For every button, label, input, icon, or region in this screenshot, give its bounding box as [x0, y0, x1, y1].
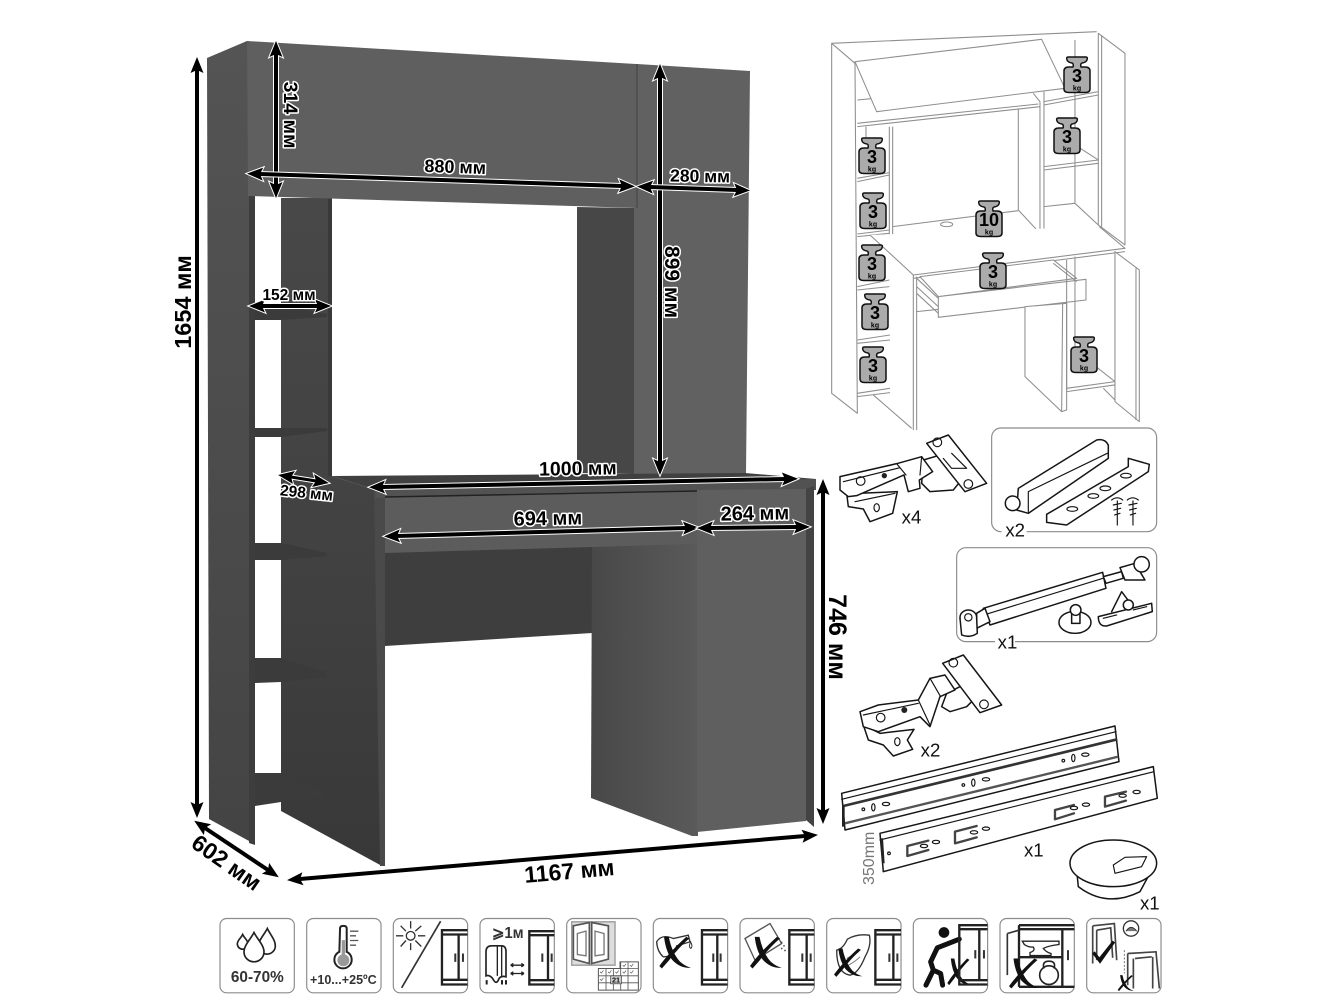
- hardware upper group: [840, 428, 1157, 652]
- right upper door: [1098, 33, 1125, 245]
- weight: 3 kg drawer: [980, 253, 1006, 288]
- runner length label: 350mm: [861, 832, 878, 885]
- weight: 10 kg desktop: kg: [985, 230, 993, 236]
- pedestal door: [697, 489, 806, 832]
- weight: 3 kg left shelf 4: [862, 294, 888, 330]
- dimension: 880 mm: 880 мм: [424, 156, 486, 178]
- pedestal inner side: [591, 535, 698, 836]
- weight: 3 kg right shelf: kg: [1063, 146, 1071, 154]
- icon: do not overload shelves: [1000, 918, 1074, 993]
- weight: 3 kg right shelf: 3: [1062, 127, 1072, 147]
- weight: 3 kg top right: kg: [1073, 86, 1081, 92]
- weight: 3 kg left shelf 3: [859, 245, 885, 280]
- weight: 3 kg left shelf 5: 3: [868, 356, 878, 376]
- weight: 3 kg drawer: kg: [989, 282, 997, 288]
- weight: 3 kg left shelf 3: kg: [868, 274, 876, 280]
- cable grommet x1: x1: [1140, 892, 1160, 913]
- desk back panel: [385, 540, 592, 646]
- pedestal and lower door: [1025, 252, 1139, 422]
- hardware lower group: [842, 655, 1160, 913]
- icon: do not move by pushing: [913, 918, 988, 993]
- drawer runner 1: [842, 726, 1119, 830]
- hinge x2: x2: [921, 740, 940, 761]
- icon: 1 m distance from heaters: ⩾1м: [492, 925, 524, 942]
- furniture: dark grey desk with hutch: [207, 41, 816, 866]
- hinge x4: x4: [902, 506, 921, 527]
- dimension: desk height 746 mm: 746 мм: [823, 594, 851, 680]
- icon: no sharp or hot objects: [653, 918, 728, 993]
- weight: 3 kg left shelf 5: kg: [869, 376, 877, 382]
- icon: temperature +10...+25°C: +10...+25ºC: [310, 972, 377, 987]
- cable grommet x1: [1070, 840, 1160, 913]
- icon: window ventilation and calendar: 21: [612, 975, 620, 984]
- dimension: 880 mm: [260, 156, 622, 186]
- weight: 3 kg left shelf 1: 3: [867, 147, 877, 167]
- right tower interior panel: [577, 207, 634, 474]
- weight: 3 kg left shelf 1: [859, 138, 885, 174]
- dimension: 694 mm: 694 мм: [513, 507, 582, 531]
- dimension: 1000 mm: 1000 мм: [539, 457, 617, 481]
- weight: 3 kg left shelf 5: [860, 347, 886, 382]
- dimension: width 1167 mm: [300, 836, 805, 888]
- open drawer: [917, 260, 1086, 317]
- weight: 3 kg pedestal: [1071, 337, 1097, 372]
- weight: 3 kg right shelf: [1054, 118, 1080, 154]
- dimension: 314 mm: 314 мм: [279, 82, 301, 148]
- box: door damper x2: [992, 428, 1157, 541]
- hinge x4: [840, 435, 987, 527]
- weight: 3 kg left shelf 4: kg: [871, 322, 879, 330]
- care and usage icon row: [220, 918, 1161, 993]
- dimension: width 1167 mm: 1167 мм: [523, 854, 615, 888]
- weight: 3 kg pedestal: kg: [1080, 366, 1088, 372]
- upper cabinet flap door: [247, 41, 637, 208]
- weight: 3 kg pedestal: 3: [1079, 346, 1089, 366]
- weight: 3 kg left shelf 2: kg: [869, 222, 877, 228]
- dimension: 314 mm: [276, 54, 301, 185]
- box: door damper x2: x2: [1005, 520, 1025, 541]
- weight: 3 kg left shelf 1: kg: [868, 166, 876, 174]
- right tower door: [634, 64, 750, 475]
- icon: window ventilation and calendar: [567, 918, 641, 993]
- hutch outline: [832, 32, 1098, 413]
- box: gas lift x1: x1: [998, 631, 1017, 652]
- desk top: [870, 227, 1125, 275]
- dimension: 264 mm: 264 мм: [720, 502, 789, 526]
- weight: 3 kg left shelf 2: 3: [868, 202, 878, 222]
- desk top surface: [332, 473, 816, 498]
- weight: 3 kg top right: [1064, 57, 1090, 92]
- left tall side panel: [207, 41, 255, 845]
- icon: no abrasive powder: [740, 918, 814, 993]
- dimension: 694 mm: [397, 507, 686, 536]
- weight: 3 kg left shelf 2: [860, 193, 886, 228]
- weight: 3 kg left shelf 3: 3: [867, 254, 877, 274]
- dimension: 280 mm: [650, 165, 737, 190]
- weight: 3 kg drawer: 3: [988, 262, 998, 282]
- weight: 3 kg left shelf 4: 3: [870, 303, 880, 323]
- drawer runner 2: [880, 767, 1157, 872]
- dimension: 899 mm: 899 мм: [660, 246, 683, 318]
- left column shelves: [255, 305, 327, 806]
- weight: 3 kg top right: 3: [1072, 66, 1082, 86]
- icon: correct way to lift and mount: [1087, 918, 1161, 993]
- drawer front: [385, 491, 698, 553]
- icon: keep from sunlight: [393, 918, 468, 993]
- dimension: 280 mm: 280 мм: [670, 165, 730, 187]
- hinge x2: [860, 655, 1002, 761]
- cable grommet: [941, 222, 953, 227]
- icon: humidity 60-70%: 60-70%: [231, 969, 284, 986]
- weight: 10 kg desktop: 10: [979, 210, 999, 230]
- load weights: [859, 57, 1097, 382]
- dimension: 1000 mm: [382, 457, 785, 487]
- lift-up flap door: [855, 39, 1065, 112]
- icon: no wet cloth: [827, 918, 901, 993]
- desk right edge strip: [806, 486, 814, 827]
- icon: humidity 60-70%: [220, 918, 294, 993]
- line drawing: open furniture with shelf load limits: [832, 32, 1139, 430]
- dimension: total height 1654 mm: 1654 мм: [170, 255, 196, 349]
- icon: 1 m distance from heaters: [480, 918, 554, 993]
- runner quantity: x1: [1024, 840, 1044, 861]
- dimension: 298 mm: 298 мм: [279, 482, 334, 505]
- inner shelf column and desk side: [281, 198, 385, 866]
- box: gas lift x1: [957, 548, 1157, 652]
- weight: 10 kg desktop: [976, 201, 1002, 236]
- dimension: depth 602 mm: 602 мм: [187, 829, 266, 896]
- seam between flap and tower: [636, 64, 638, 208]
- dimension: 152 mm: 152 мм: [262, 287, 316, 304]
- icon: temperature +10...+25°C: [307, 918, 381, 993]
